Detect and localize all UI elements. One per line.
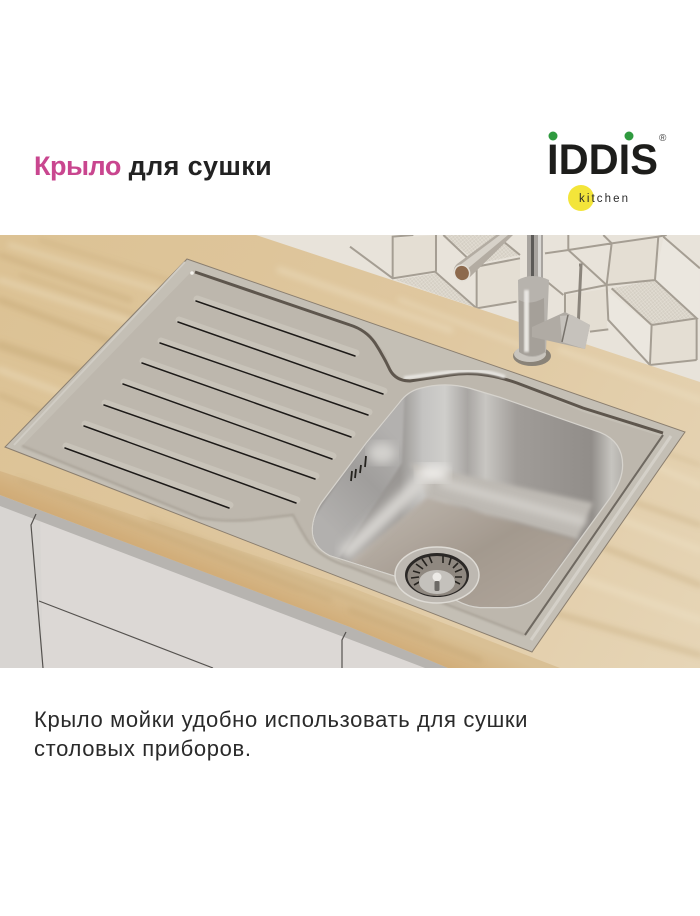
faucet lever — [578, 265, 581, 330]
countertop front edge — [0, 471, 560, 668]
wood grain streaks — [0, 240, 700, 660]
tile shaded faces — [350, 235, 700, 365]
faucet spout — [454, 235, 513, 280]
logo yellow circle — [568, 185, 594, 211]
logo green dots — [548, 132, 634, 140]
faucet body — [527, 235, 543, 283]
faucet handle — [532, 312, 590, 349]
logo kitchen word: kitchen — [579, 193, 630, 205]
countertop — [0, 235, 700, 668]
cabinet fronts — [0, 495, 470, 668]
bowl lower band — [426, 473, 594, 540]
photo: kitchen sink with drainer wing — [0, 235, 700, 668]
registered mark: ® — [659, 133, 667, 144]
body text — [34, 707, 528, 761]
faucet — [452, 235, 590, 366]
bowl left wall — [313, 398, 404, 558]
body text: столовых приборов. — [34, 736, 252, 761]
overflow slots — [351, 456, 366, 481]
drainer ribs — [65, 299, 384, 508]
logo wordmark: IDDIS — [547, 136, 658, 184]
groove around drainer — [195, 272, 663, 433]
bowl floor — [345, 497, 577, 612]
logo: IDDIS kitchen — [547, 132, 667, 211]
wall tiles — [240, 235, 700, 395]
title: Крыло для сушки — [34, 151, 272, 181]
body text: Крыло мойки удобно использовать для сушки — [34, 707, 528, 732]
sink bowl — [312, 384, 624, 608]
drainer surface — [22, 270, 663, 635]
drain strainer — [395, 547, 479, 603]
sink body — [5, 259, 685, 652]
counter shadow — [0, 495, 460, 668]
